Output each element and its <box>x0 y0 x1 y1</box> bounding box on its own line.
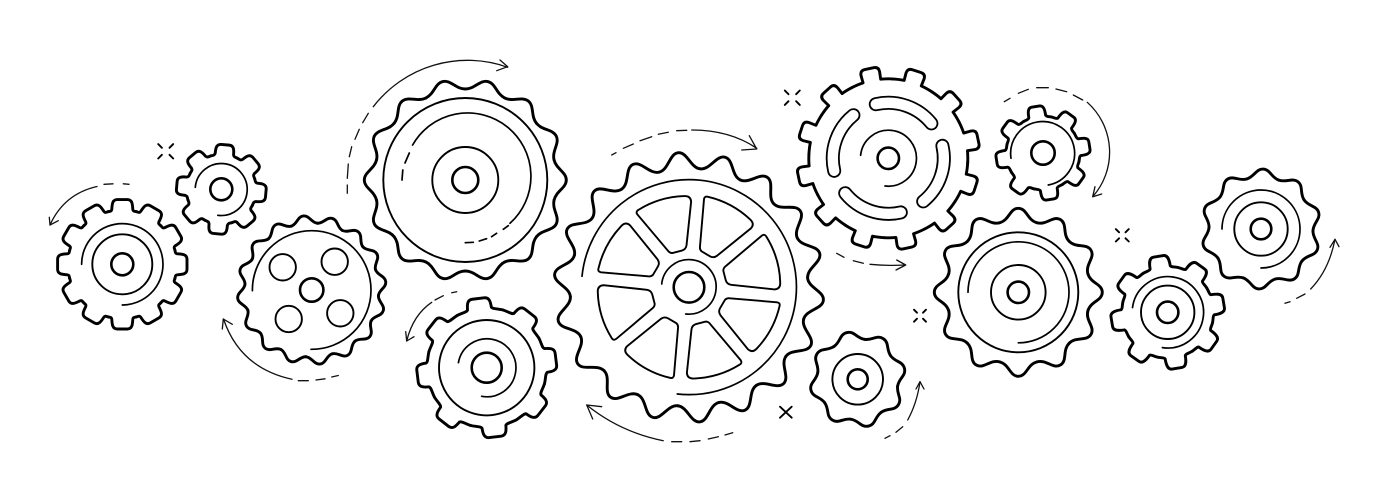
hub <box>1157 302 1178 323</box>
highlight arc <box>252 231 371 349</box>
gear: upper right, with curved slots <box>780 50 997 267</box>
highlight arc <box>82 224 163 305</box>
gear outline <box>1197 167 1325 291</box>
gear outline <box>934 208 1102 376</box>
highlight arc with dashed ends <box>402 113 531 243</box>
arrow: central gear top <box>612 130 757 155</box>
gear: far right, wavy teeth <box>1197 167 1325 291</box>
highlight arc <box>195 164 247 216</box>
inner ring <box>1234 202 1288 256</box>
highlight arc <box>1132 277 1204 348</box>
highlight arc <box>1222 190 1300 268</box>
gear: large right, wavy teeth <box>934 208 1102 376</box>
highlight arc <box>1011 122 1075 185</box>
cross mark <box>780 407 792 418</box>
highlight arc <box>968 242 1069 343</box>
arrow: small upper right gear rotation <box>1004 88 1110 197</box>
gear outline <box>800 322 915 437</box>
inner ring <box>991 265 1046 320</box>
gear: far left, 12 knob teeth <box>58 200 187 329</box>
hub <box>1008 282 1029 303</box>
arrow: holed gear rotation <box>222 319 338 381</box>
gear outline <box>780 50 997 267</box>
gear outline <box>173 141 270 238</box>
gear outline <box>409 290 564 445</box>
hub <box>111 253 133 275</box>
gear: lower centre left, 8 knob teeth <box>409 290 564 445</box>
arrow: lower centre left gear rotation <box>406 292 457 341</box>
sparkle: upper left <box>158 144 173 158</box>
sparkle: top centre right <box>785 90 800 105</box>
arrow: central gear bottom <box>587 405 733 442</box>
spoke windows <box>580 178 798 397</box>
highlight arc <box>861 130 916 186</box>
highlight arc <box>458 339 516 397</box>
gear outline <box>542 142 836 433</box>
gear outline <box>342 59 588 301</box>
arrow: left gear rotation <box>49 184 129 225</box>
gear outline <box>1102 247 1233 378</box>
arrow: small bottom gear rotation <box>885 382 924 438</box>
gear: large upper left, wavy teeth <box>342 59 588 301</box>
gear outline <box>989 99 1097 207</box>
outer ring <box>383 98 547 262</box>
gear: lower right, 8 knob teeth <box>1102 247 1233 378</box>
gear: small upper right, 8 knob teeth <box>989 99 1097 207</box>
gear: central large spoked wheel <box>542 142 836 433</box>
gear outline <box>229 208 394 372</box>
middle ring <box>432 147 498 213</box>
outer ring <box>958 232 1078 352</box>
hub <box>848 369 868 389</box>
hub <box>300 278 323 302</box>
holes <box>270 248 354 332</box>
hub <box>452 167 478 193</box>
hub <box>1031 141 1055 165</box>
outer ring <box>832 354 883 405</box>
curved slots <box>833 103 944 214</box>
hub <box>674 272 704 303</box>
gear: with round holes <box>229 208 394 372</box>
hub arc <box>662 260 716 314</box>
inner ring <box>92 234 152 294</box>
sparkle: centre right <box>914 310 926 322</box>
arrow: large upper left gear rotation <box>347 60 508 193</box>
gear: small bottom, wavy teeth <box>800 322 915 437</box>
middle ring <box>1141 286 1194 339</box>
gear outline <box>58 200 187 329</box>
arrow: far right gear rotation <box>1285 239 1339 303</box>
hub <box>1251 219 1271 239</box>
hub <box>472 353 502 383</box>
hub <box>210 178 232 200</box>
outer ring <box>439 320 534 415</box>
gear: small upper left, 8 knob teeth <box>173 141 270 238</box>
rim arc <box>582 180 796 395</box>
hub <box>878 148 899 169</box>
sparkle: right <box>1116 229 1129 242</box>
arrow: slotted gear rotation <box>837 253 906 270</box>
